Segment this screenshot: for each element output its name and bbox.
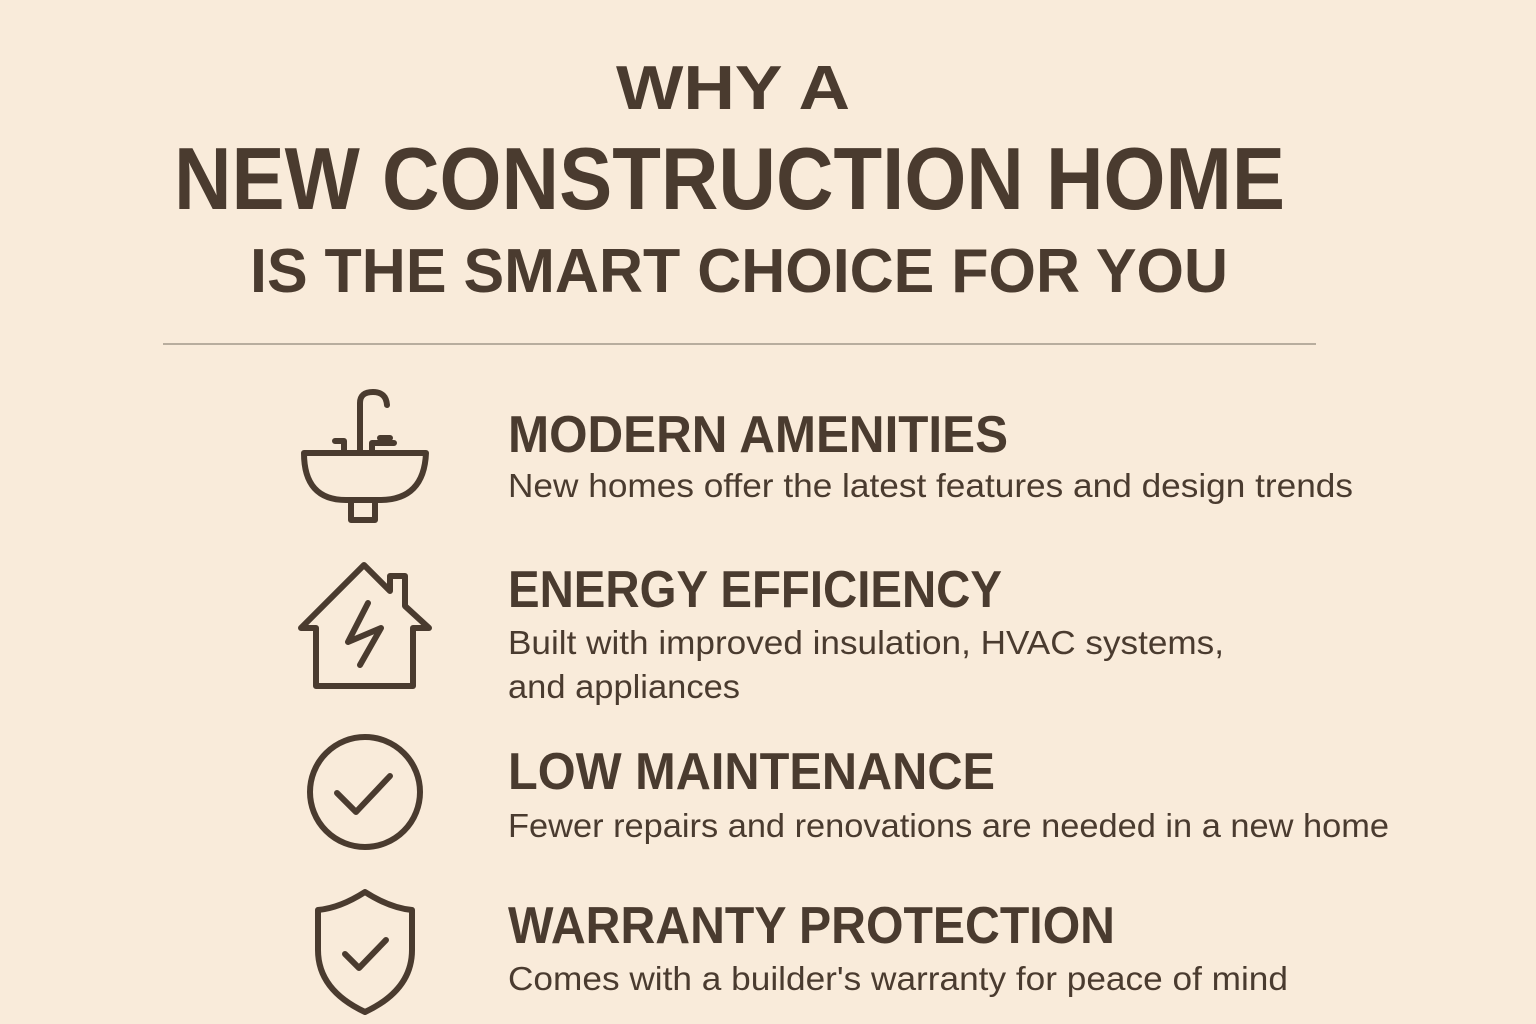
item: energy efficiency: ENERGY EFFICIENCY	[508, 561, 1002, 619]
icon: check circle	[310, 737, 420, 847]
item: low maintenance	[310, 737, 1389, 847]
title: WHY A	[616, 54, 850, 123]
title	[174, 54, 1285, 306]
item: warranty protection	[318, 892, 1288, 1012]
item: warranty protection: WARRANTY PROTECTION	[508, 897, 1115, 955]
title: NEW CONSTRUCTION HOME	[174, 129, 1285, 228]
item: energy efficiency: Built with improved insulation, HVAC systems,	[508, 624, 1224, 661]
item: energy efficiency	[301, 561, 1224, 705]
icon: house with bolt	[301, 565, 429, 686]
item: warranty protection: Comes with a builder's warranty for peace of mind	[508, 960, 1288, 997]
icon: sink	[304, 392, 426, 520]
item: modern amenities: MODERN AMENITIES	[508, 406, 1008, 464]
item: low maintenance: LOW MAINTENANCE	[508, 743, 995, 801]
item: modern amenities: New homes offer the latest features and design trends	[508, 467, 1353, 504]
item: low maintenance: Fewer repairs and renovations are needed in a new home	[508, 807, 1389, 844]
item: energy efficiency: and appliances	[508, 668, 740, 705]
title: IS THE SMART CHOICE FOR YOU	[250, 237, 1228, 306]
item: modern amenities	[304, 392, 1353, 520]
icon: shield check	[318, 892, 412, 1012]
